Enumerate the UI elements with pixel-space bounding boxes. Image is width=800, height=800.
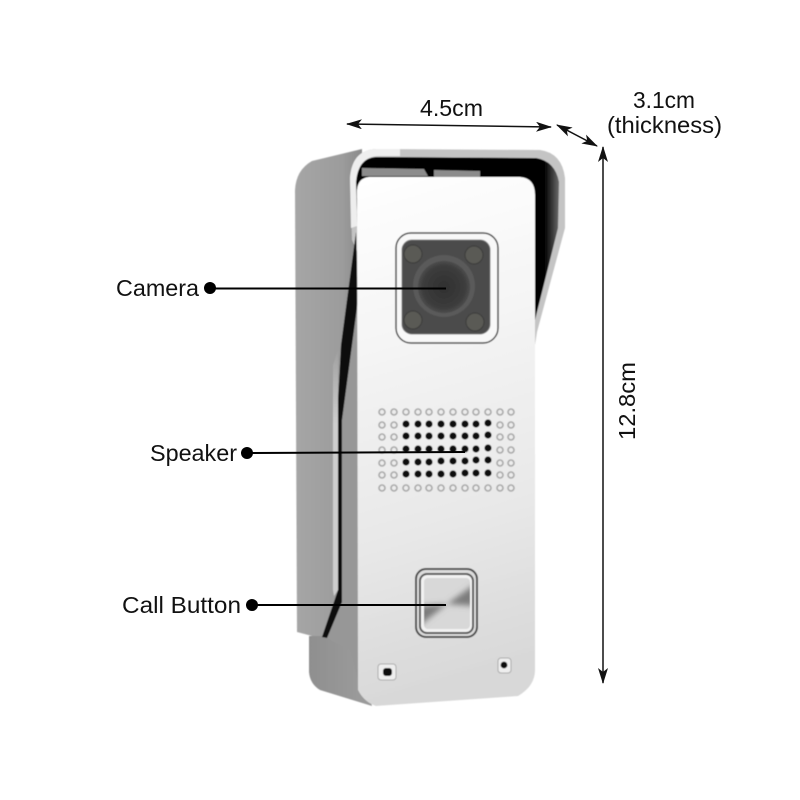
callout: speaker: Speaker [150,440,237,466]
thickness note: (thickness) [607,112,722,138]
channel panel [326,300,358,680]
hood outer shell [350,149,565,345]
left lower rim highlight [333,350,338,596]
callout: speaker [150,440,465,466]
face plate [357,177,535,706]
button inner ring [420,574,473,633]
callout: camera: Camera [116,275,199,301]
left channel dark line [322,232,358,638]
back housing, left side [295,149,362,640]
button face [424,578,470,629]
outer ring of holes [379,409,514,491]
screw hole left [378,664,396,680]
width label: 4.5cm [420,95,483,121]
camera bezel [396,233,498,343]
lower housing [309,636,372,706]
left hood rim highlight [350,149,400,228]
open speaker holes [402,419,492,478]
infographic canvas [117,92,721,706]
speaker grille [379,409,514,491]
height arrow [602,147,604,683]
height label: 12.8cm [614,362,640,440]
camera window [402,240,490,334]
callout: call button [122,592,446,618]
infrared LEDs [404,245,484,331]
call button [416,569,477,637]
callout: call button: Call Button [122,592,241,618]
callout: camera [116,275,446,301]
hood dark interior [356,157,559,320]
button bezel [416,569,477,637]
width arrow [347,124,551,127]
thickness dimension [557,87,722,146]
thickness label: 3.1cm [633,87,695,113]
screw hole right [498,658,511,673]
button brushed shading [424,584,470,626]
doorbell device [295,149,565,706]
camera lens [413,255,475,317]
thickness arrow [557,125,597,146]
width dimension [347,95,551,127]
hood top bracket [362,168,480,177]
camera module [396,233,498,343]
